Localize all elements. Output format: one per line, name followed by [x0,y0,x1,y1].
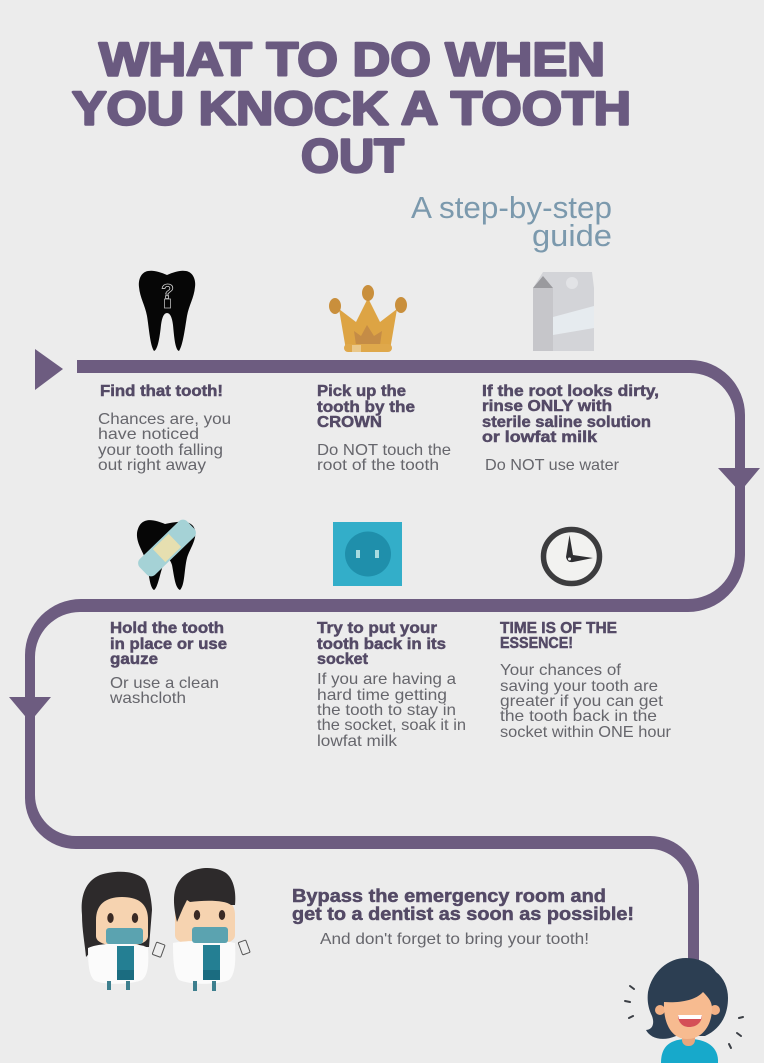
step 6 text [500,620,672,741]
step 5 text: hard time getting [317,687,447,704]
step 3 text: Do NOT use water [485,457,620,474]
subtitle [411,190,612,253]
step 2 text: CROWN [317,414,382,431]
arrow: down right [718,468,760,492]
arrow: down left [9,697,51,722]
step 3 text: rinse ONLY with [482,398,612,415]
step 5 text: the socket, soak it in [317,717,466,734]
icon: male doctor [173,868,250,991]
final step text: And don't forget to bring your tooth! [320,931,589,948]
step 2 text: tooth by the [317,399,415,416]
icon: wall socket [333,522,402,586]
title: WHAT TO DO WHEN [99,32,605,86]
step 1 text: have noticed [98,426,199,443]
step 4 text: gauze [110,651,158,668]
step 5 text: tooth back in its [317,636,446,653]
step 1 text [98,383,231,474]
step 4 text: in place or use [110,636,227,653]
arrow: start [35,349,63,390]
final step text: get to a dentist as soon as possible! [292,904,634,924]
step 4 text: washcloth [109,690,186,707]
step 1 text: Chances are, you [98,411,231,428]
icon: bandaged tooth [136,517,198,590]
icon: tooth with question mark: ? [161,280,174,304]
step 1 text: out right away [98,457,206,474]
step 6 text: the tooth back in the [500,708,657,725]
step 6 text: ESSENCE! [500,635,573,652]
timeline path [25,360,745,962]
title: OUT [301,129,404,182]
icon: clock [544,530,600,584]
step 3 text: sterile saline solution [482,414,651,431]
step 1 text: your tooth falling [98,442,223,459]
step 6 text: socket within ONE hour [500,724,672,741]
subtitle: guide [532,218,612,253]
step 2 text: Pick up the [317,383,406,400]
icon: smiling patient [646,958,728,1063]
step 4 text: Hold the tooth [110,620,224,637]
icon: crown [329,285,407,352]
step 2 text: root of the tooth [317,457,439,474]
step 5 text: the tooth to stay in [317,702,456,719]
step 4 text: Or use a clean [110,675,219,692]
step 6 text: saving your tooth are [500,678,658,695]
icon: milk carton [533,272,594,351]
title [72,32,631,182]
step 5 text: If you are having a [317,671,456,688]
subtitle: A step-by-step [411,190,612,225]
final step text [292,886,634,948]
step 1 text: Find that tooth! [100,383,223,400]
step 6 text: TIME IS OF THE [500,620,617,637]
step 2 text: Do NOT touch the [317,442,451,459]
step 5 text [317,620,466,750]
icon: tooth with question mark [139,271,195,351]
step 5 text: lowfat milk [317,733,398,750]
step 5 text: Try to put your [317,620,437,637]
step 3 text: or lowfat milk [482,429,597,446]
step 6 text: Your chances of [500,662,622,679]
step 5 text: socket [317,651,369,668]
final step text: Bypass the emergency room and [292,886,606,906]
step 3 text: If the root looks dirty, [482,383,659,400]
step 3 text [482,383,659,474]
icon: female doctor [82,872,165,990]
step 6 text: greater if you can get [500,693,664,710]
step 2 text [317,383,451,474]
step 4 text [109,620,227,707]
title: YOU KNOCK A TOOTH [72,82,631,134]
icon: patient emphasis marks [625,986,743,1048]
